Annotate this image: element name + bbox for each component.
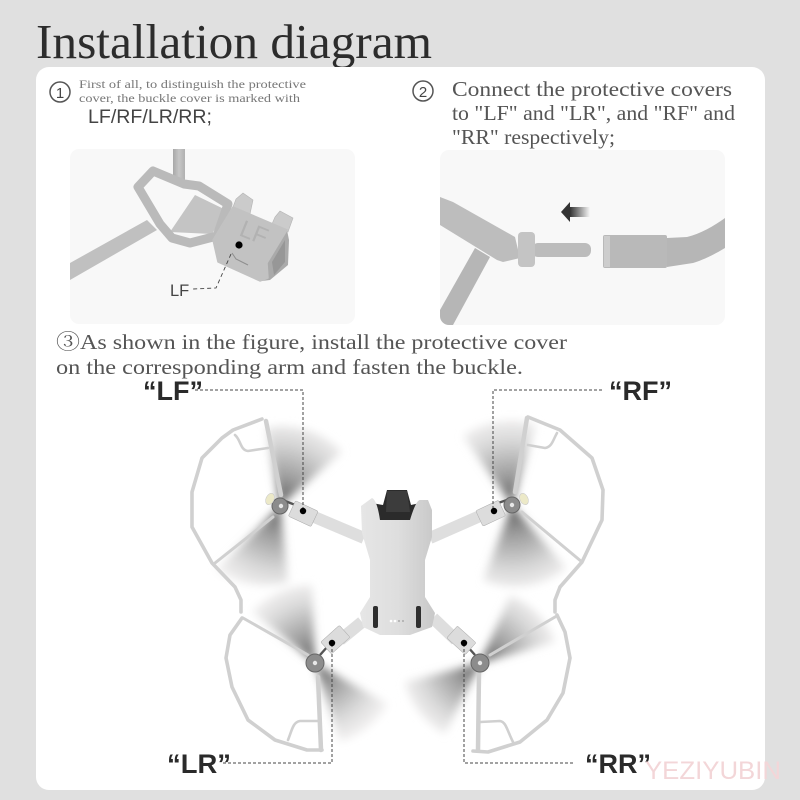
- buckle: right front: [476, 500, 506, 526]
- drone arms: [312, 516, 480, 640]
- buckle cover: [213, 207, 287, 281]
- step 1 description line 2: cover, the buckle cover is marked with: [79, 91, 300, 105]
- hub centers: [279, 503, 514, 665]
- step 2 text block: [413, 77, 736, 149]
- arrow: direction of insertion: [561, 202, 590, 222]
- diagonal rod: [70, 220, 157, 280]
- step 2 description line 2: to "LF" and "LR", and "RF" and: [452, 101, 736, 125]
- ring inner wedge: [170, 195, 226, 234]
- drone status lights: [390, 620, 404, 622]
- label: RF: “RF”: [609, 376, 672, 406]
- icon: step number 2: 2: [419, 84, 427, 101]
- buckle ring: [138, 171, 228, 243]
- buckle tab left: [233, 193, 253, 214]
- guard: right front: [515, 417, 603, 612]
- buckle inner lining: [272, 240, 285, 275]
- arm going down: [440, 248, 490, 325]
- step 3 description line 2: on the corresponding arm and fasten the buckle.: [56, 355, 523, 379]
- guard: left rear: [226, 618, 322, 750]
- buckle tab right: [272, 211, 293, 232]
- motor links: [285, 500, 507, 655]
- right band: [667, 218, 725, 267]
- icon: step number 1: 1: [56, 85, 64, 102]
- title: Installation diagram: [36, 14, 432, 69]
- callout leaders: [195, 390, 602, 763]
- drone body: [360, 498, 435, 635]
- LF label: LF: [170, 282, 189, 300]
- watermark: YEZIYUBIN: [645, 757, 781, 785]
- step 1 marks: LF/RF/LR/RR;: [88, 107, 212, 128]
- label: LR: “LR”: [167, 749, 231, 779]
- motor lights: [264, 492, 530, 506]
- hubs: [272, 497, 520, 672]
- step 3 description line 1: ③As shown in the figure, install the protective cover: [56, 330, 567, 354]
- guard: right rear: [473, 615, 570, 752]
- buckle side opening: [262, 230, 289, 281]
- label: LF: “LF”: [143, 376, 203, 406]
- embossed LF mark: LF: [236, 216, 272, 251]
- icon: step number 1: [50, 82, 70, 102]
- left band: [440, 197, 520, 262]
- dashed leader: [193, 254, 231, 289]
- socket: [603, 235, 667, 268]
- vertical rod: [173, 149, 185, 180]
- buckle: left rear: [321, 625, 350, 654]
- step 1 description line 1: First of all, to distinguish the protective: [79, 77, 306, 91]
- connector pin: [532, 243, 591, 257]
- socket edge: [604, 236, 610, 267]
- propeller blades: [216, 421, 566, 742]
- buckle: left front: [288, 501, 318, 527]
- step 2 description line 1: Connect the protective covers: [452, 77, 732, 101]
- label: RR: “RR”: [585, 749, 651, 779]
- panel: connecting the covers: [440, 197, 725, 325]
- drone rear vents: [373, 606, 421, 628]
- guard: left front: [192, 419, 281, 612]
- buckle slot: [232, 253, 248, 265]
- step 3 text: [56, 330, 567, 379]
- diagram: drone with guards: [192, 417, 603, 752]
- marker dot: [235, 241, 243, 249]
- step 1 text block: [50, 77, 306, 128]
- buckle: right rear: [447, 626, 476, 655]
- panel: buckle close-up: [70, 149, 294, 296]
- drone camera: [372, 490, 420, 522]
- step 2 description line 3: "RR" respectively;: [452, 125, 615, 149]
- icon: step number 2: [413, 81, 433, 101]
- callout dots: [300, 508, 497, 646]
- connector collar: [518, 232, 535, 267]
